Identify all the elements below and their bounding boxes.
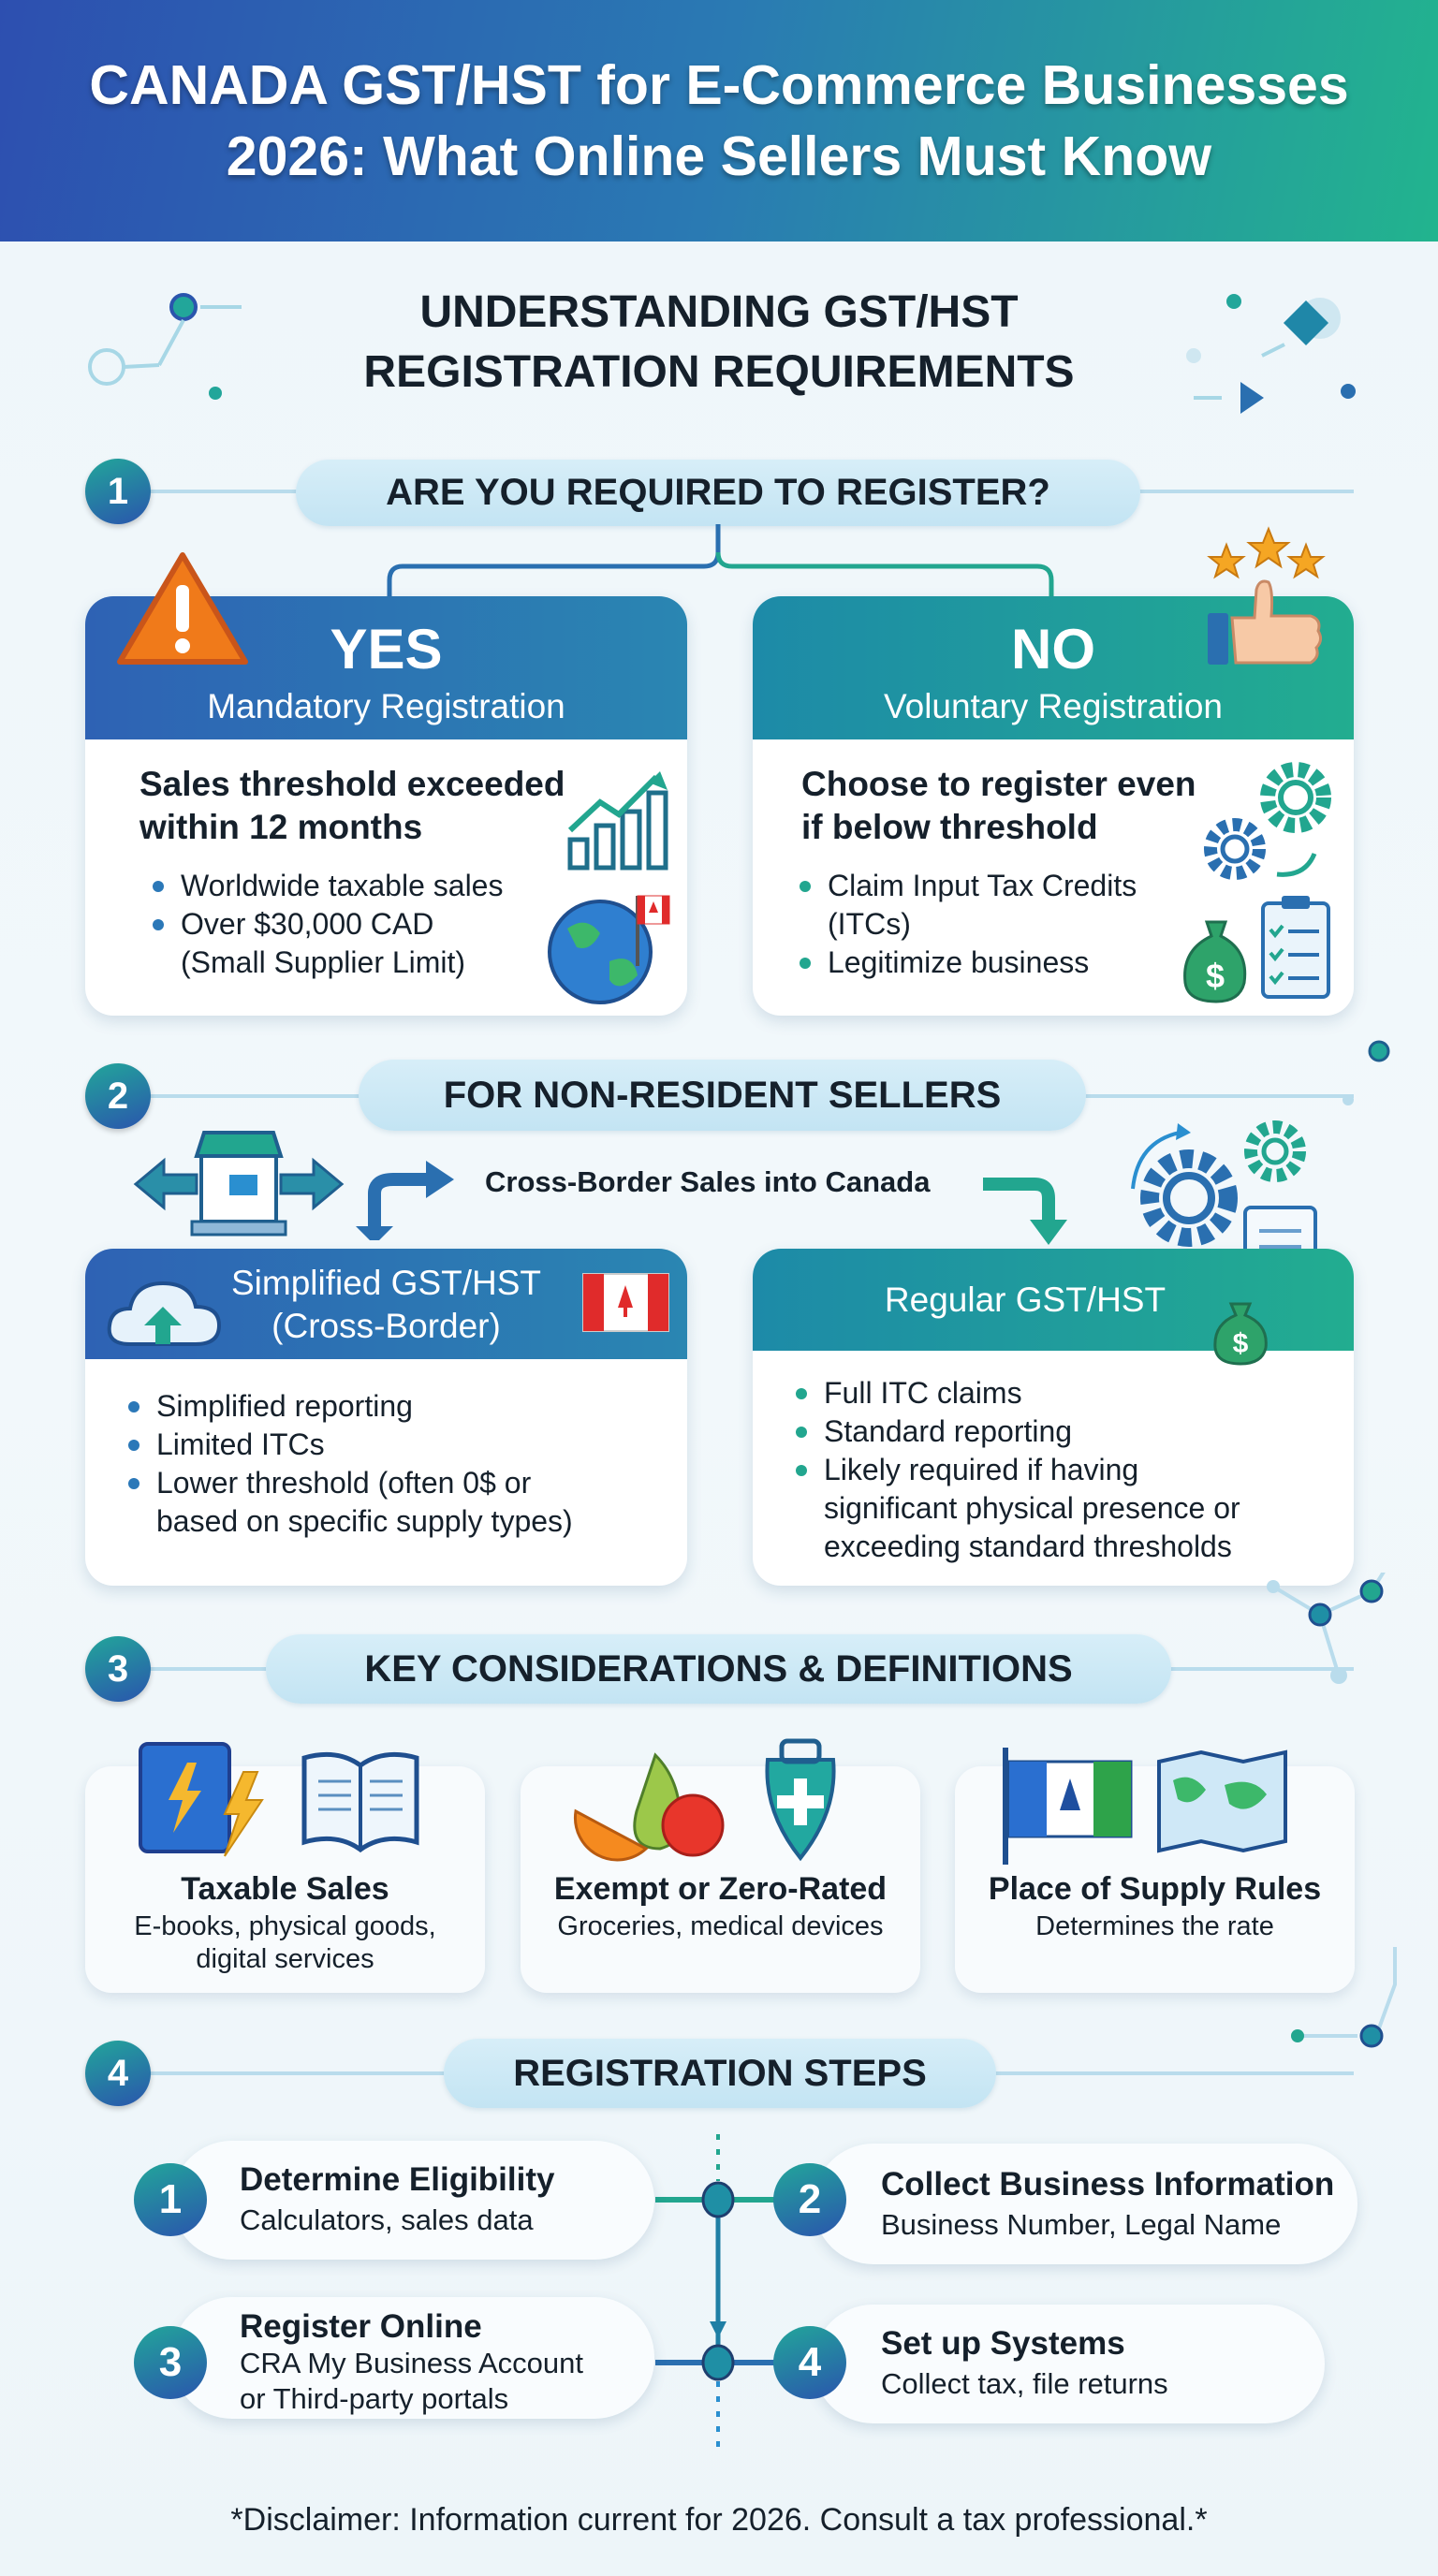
card: no voluntary: (ITCs) <box>828 907 911 941</box>
icon: warning triangle <box>117 552 248 665</box>
pill: key considerations <box>266 1634 1171 1704</box>
pill: key considerations: KEY CONSIDERATIONS & DEFINITIONS <box>364 1648 1073 1690</box>
step number 1 <box>85 459 151 524</box>
icon: gears and document <box>1131 1120 1317 1249</box>
text: 4 <box>799 2339 821 2385</box>
card: taxable sales <box>85 1766 485 1993</box>
card: simplified gst/hst: Simplified reporting <box>156 1389 413 1423</box>
card: exempt or zero-rated: Exempt or Zero-Rated <box>554 1871 887 1907</box>
icon: money bag <box>1213 1303 1268 1365</box>
card: no voluntary: Choose to register even <box>801 765 1196 803</box>
icon: gears <box>1204 762 1331 880</box>
card: simplified gst/hst: (Cross-Border) <box>271 1307 501 1345</box>
section heading: understanding registration: UNDERSTANDING GST/HST <box>419 287 1019 337</box>
step number 2 <box>85 1063 151 1129</box>
section heading: understanding registration <box>363 287 1075 397</box>
step 2: Collect Business Information <box>881 2166 1334 2203</box>
icon: growth chart <box>567 771 668 871</box>
icon: cloud upload <box>107 1281 221 1346</box>
text: cross-border sales: Cross-Border Sales into Canada <box>485 1165 930 1198</box>
step 1: Determine Eligibility <box>240 2161 554 2198</box>
icon: storefront with arrows <box>133 1131 345 1236</box>
text: 1 <box>159 2176 182 2222</box>
card: regular gst/hst: exceeding standard thresholds <box>824 1530 1232 1563</box>
icon: thumbs up with stars <box>1207 526 1326 665</box>
step number 3: 3 <box>108 1648 128 1690</box>
card: yes mandatory: within 12 months <box>139 808 422 846</box>
card: yes mandatory: Worldwide taxable sales <box>181 869 503 902</box>
card: place of supply <box>955 1766 1355 1993</box>
step 2 <box>814 2144 1357 2264</box>
text: 2 <box>799 2176 821 2222</box>
icon: money bag and checklist: $ <box>1206 957 1225 995</box>
card: simplified gst/hst: Lower threshold (often 0$ or <box>156 1466 531 1500</box>
card: place of supply: Place of Supply Rules <box>989 1871 1321 1907</box>
pill: for non-resident sellers <box>359 1060 1086 1131</box>
card: yes mandatory: Sales threshold exceeded <box>139 765 565 803</box>
step number 4 <box>85 2041 151 2106</box>
card: yes mandatory: YES <box>330 618 443 681</box>
section heading: understanding registration: REGISTRATION REQUIREMENTS <box>363 347 1075 397</box>
step 1: Calculators, sales data <box>240 2203 534 2236</box>
step 4: Collect tax, file returns <box>881 2367 1168 2400</box>
card: no voluntary: NO <box>1011 618 1095 681</box>
card: simplified gst/hst: Limited ITCs <box>156 1427 325 1461</box>
icon: fruit and medical shield <box>573 1739 836 1861</box>
card: regular gst/hst: Likely required if having <box>824 1453 1138 1486</box>
card: regular gst/hst <box>753 1249 1354 1586</box>
card: exempt or zero-rated: Groceries, medical devices <box>557 1911 884 1941</box>
card: taxable sales: digital services <box>196 1944 374 1974</box>
cross-border sales row <box>133 1131 1067 1245</box>
icon: down arrow <box>983 1178 1067 1245</box>
card: taxable sales: Taxable Sales <box>181 1871 389 1907</box>
icon: money bag and checklist <box>1183 896 1330 1003</box>
card: simplified gst/hst <box>85 1249 687 1586</box>
step number 4: 4 <box>108 2053 128 2094</box>
pill: are you required <box>296 460 1140 526</box>
card: no voluntary: Voluntary Registration <box>884 687 1223 725</box>
icon: money bag: $ <box>1233 1328 1249 1359</box>
step 1 <box>172 2141 654 2260</box>
card: yes mandatory <box>85 596 687 1016</box>
card: no voluntary: Claim Input Tax Credits <box>828 869 1137 902</box>
title: 2026: What Online Sellers Must Know <box>227 125 1211 187</box>
icon: canadian flag <box>582 1273 669 1332</box>
step 4: Set up Systems <box>881 2325 1125 2362</box>
icon: flag and map <box>1003 1748 1287 1865</box>
card: no voluntary: if below threshold <box>801 808 1098 846</box>
card: exempt or zero-rated <box>521 1766 920 1993</box>
card: regular gst/hst: Full ITC claims <box>824 1376 1022 1410</box>
card: regular gst/hst: Standard reporting <box>824 1414 1072 1448</box>
card: place of supply: Determines the rate <box>1035 1911 1274 1941</box>
title <box>89 54 1349 187</box>
step 2: Business Number, Legal Name <box>881 2208 1281 2241</box>
text: 3 <box>159 2339 182 2385</box>
pill: for non-resident sellers: FOR NON-RESIDENT SELLERS <box>444 1075 1001 1116</box>
decorative network icons <box>88 293 1356 414</box>
card: yes mandatory: (Small Supplier Limit) <box>181 945 465 979</box>
flow connector <box>655 2134 773 2447</box>
card: yes mandatory: Over $30,000 CAD <box>181 907 433 941</box>
step 3 <box>172 2297 654 2419</box>
disclaimer: *Disclaimer: Information current for 2026. Consult a tax professional.* <box>230 2502 1208 2538</box>
step 4 <box>814 2305 1325 2423</box>
icon: ebook and book <box>139 1742 419 1857</box>
card: regular gst/hst: significant physical presence or <box>824 1491 1240 1525</box>
title: CANADA GST/HST for E-Commerce Businesses <box>89 54 1349 116</box>
icon: globe with canadian flag <box>548 895 670 1004</box>
icon: exchange arrows <box>356 1161 454 1240</box>
card: regular gst/hst: Regular GST/HST <box>885 1281 1166 1319</box>
card: taxable sales: E-books, physical goods, <box>134 1911 436 1941</box>
card: no voluntary: Legitimize business <box>828 945 1089 979</box>
step 3: Register Online <box>240 2308 482 2345</box>
step number 2: 2 <box>108 1076 128 1117</box>
pill: registration steps <box>444 2039 996 2108</box>
step number 1: 1 <box>108 471 128 512</box>
card: simplified gst/hst: based on specific supply types) <box>156 1504 573 1538</box>
card: no voluntary <box>753 596 1354 1016</box>
step 3: CRA My Business Account <box>240 2347 583 2379</box>
header banner <box>0 0 1438 242</box>
card: simplified gst/hst: Simplified GST/HST <box>231 1264 541 1302</box>
step 3: or Third-party portals <box>240 2382 508 2415</box>
step number 3 <box>85 1636 151 1702</box>
connector: branch to yes/no <box>388 524 1054 596</box>
card: yes mandatory: Mandatory Registration <box>207 687 565 725</box>
pill: registration steps: REGISTRATION STEPS <box>513 2053 927 2094</box>
pill: are you required: ARE YOU REQUIRED TO REGISTER? <box>386 472 1050 513</box>
